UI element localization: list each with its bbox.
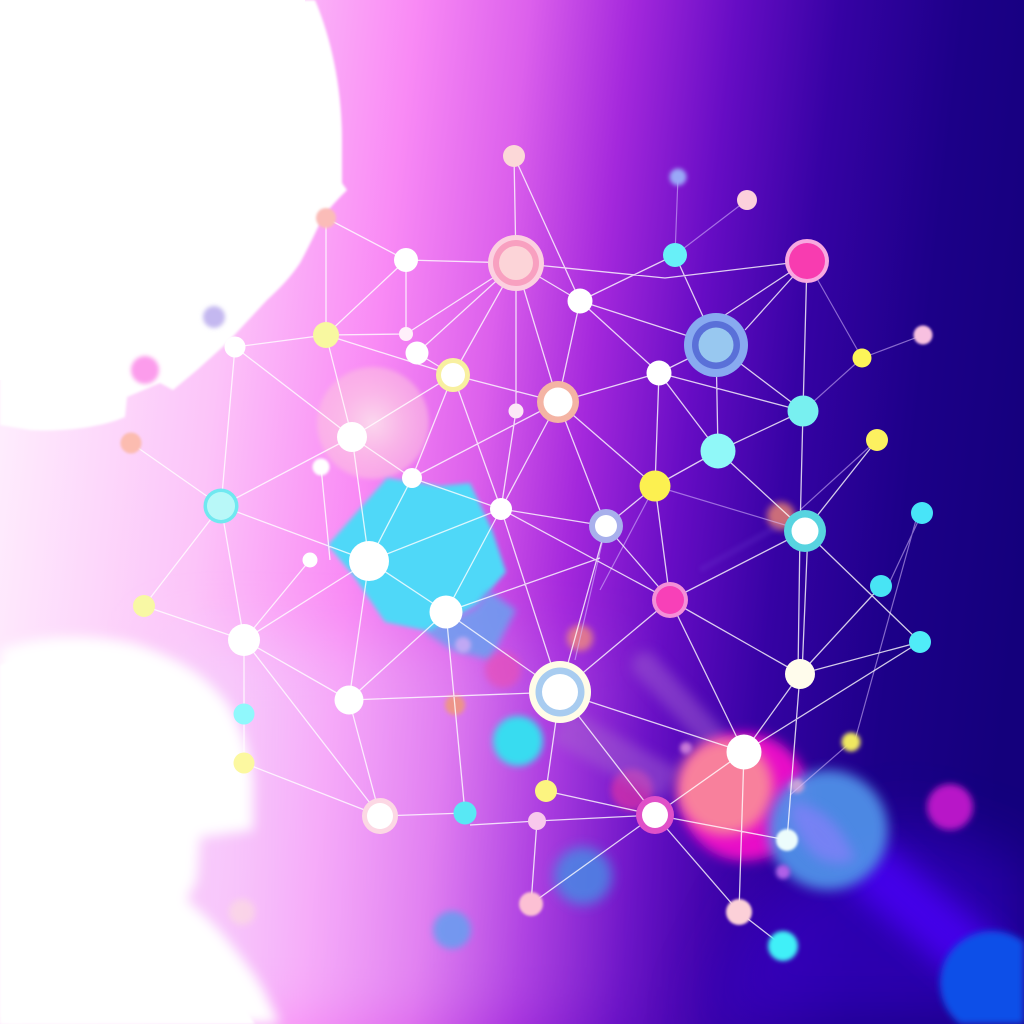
connecting lines xyxy=(131,156,920,946)
bokeh: small dot xyxy=(790,779,804,793)
node xyxy=(640,470,670,502)
bokeh: magenta dot xyxy=(927,784,973,830)
streak xyxy=(700,525,780,570)
node xyxy=(914,326,932,344)
large ring node white xyxy=(529,661,591,723)
node xyxy=(866,429,888,451)
node xyxy=(313,322,339,348)
bokeh: pink dot xyxy=(485,652,521,688)
white blob top left xyxy=(0,0,347,430)
bokeh: corner blue xyxy=(940,931,1024,1024)
violet streak xyxy=(860,860,990,970)
bokeh: orange dot xyxy=(567,625,593,651)
node xyxy=(788,396,818,426)
node xyxy=(842,732,860,752)
bokeh: lilac dot xyxy=(455,637,471,653)
node xyxy=(120,432,142,454)
node xyxy=(909,631,931,653)
node xyxy=(337,422,367,452)
blue glow xyxy=(768,770,888,890)
node xyxy=(528,812,546,830)
node xyxy=(430,596,462,628)
ring node magenta center xyxy=(652,582,688,618)
node xyxy=(406,342,428,364)
node xyxy=(224,336,246,358)
bokeh: pink dot xyxy=(611,769,653,811)
node xyxy=(490,498,512,520)
node xyxy=(228,624,260,656)
streak xyxy=(560,725,670,785)
white blob lower left xyxy=(0,637,280,1024)
magenta halo xyxy=(681,733,809,861)
violet haze lower right xyxy=(700,820,1024,1024)
ring node yellow xyxy=(436,358,470,392)
bokeh: blue dot xyxy=(433,911,471,949)
blue hexagon blob xyxy=(425,590,516,660)
node xyxy=(726,734,762,770)
ring node cyan xyxy=(784,510,826,552)
soft haze lower left xyxy=(170,640,670,1024)
node xyxy=(508,404,524,418)
node xyxy=(312,458,330,476)
ring node peach xyxy=(537,381,579,423)
node xyxy=(768,931,798,961)
cyan hexagon blob xyxy=(328,478,506,632)
node xyxy=(670,168,686,186)
node xyxy=(568,288,592,314)
node xyxy=(852,348,872,368)
node xyxy=(394,248,418,272)
bokeh: pale pink glow xyxy=(317,367,429,479)
node xyxy=(785,659,815,689)
node xyxy=(737,190,757,210)
blue glow center xyxy=(790,804,855,863)
bokeh: small dot xyxy=(680,742,692,754)
bokeh: blue dot xyxy=(554,847,612,905)
node xyxy=(700,434,736,468)
faint connecting lines xyxy=(575,177,923,795)
node xyxy=(870,575,892,597)
node xyxy=(316,208,336,228)
streak xyxy=(645,665,715,740)
ring node magenta xyxy=(785,239,829,283)
node xyxy=(402,468,422,488)
node xyxy=(646,360,672,386)
node xyxy=(911,502,933,524)
bokeh: peach dot xyxy=(229,899,255,925)
white fill lower left edge xyxy=(0,654,255,1024)
ring node periwinkle xyxy=(589,509,623,543)
bokeh: pink dot xyxy=(131,356,159,384)
node xyxy=(519,892,543,916)
network nodes xyxy=(120,145,933,961)
node xyxy=(776,829,798,851)
bokeh: small dot xyxy=(776,865,790,879)
node xyxy=(399,327,413,341)
blurred background bokeh xyxy=(131,306,1024,1024)
bokeh: orange dot xyxy=(767,502,795,530)
large ring node blue xyxy=(684,313,748,377)
white fill top left edge xyxy=(0,0,305,380)
node xyxy=(454,802,476,824)
large ring node pink xyxy=(488,235,544,291)
node xyxy=(334,686,364,714)
pink glow xyxy=(677,739,773,835)
node xyxy=(663,243,687,267)
node xyxy=(234,704,254,724)
node xyxy=(503,145,525,167)
bokeh: cyan dot xyxy=(493,716,543,766)
ring node teal xyxy=(204,488,238,524)
node xyxy=(302,552,318,568)
ring node magenta white xyxy=(636,796,674,834)
bokeh: lavender dot xyxy=(203,306,225,328)
node xyxy=(726,899,752,925)
ring node pale xyxy=(362,798,398,834)
node xyxy=(234,752,254,774)
bokeh: orange dot xyxy=(445,695,465,715)
node xyxy=(349,541,389,581)
node xyxy=(535,780,557,802)
node xyxy=(133,595,155,617)
